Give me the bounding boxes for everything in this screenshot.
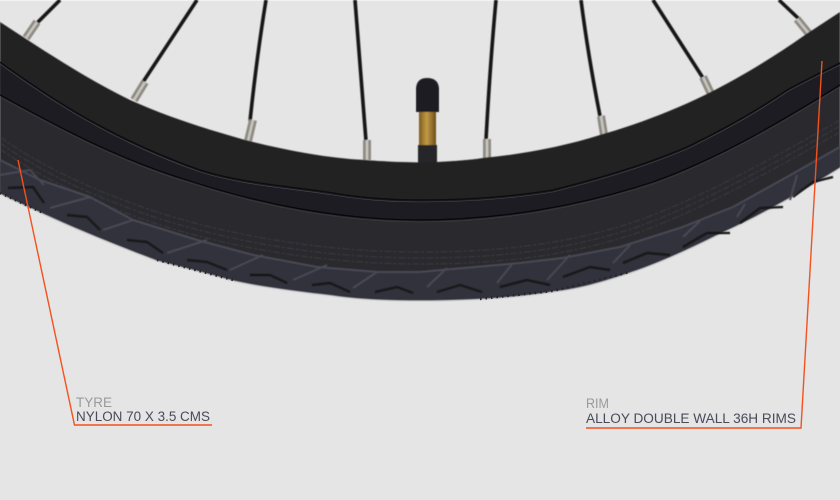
- callout: tyre: [18, 160, 212, 425]
- tread chevrons: [0, 147, 840, 293]
- tread band: [0, 147, 840, 300]
- tyre knobs: [0, 193, 630, 299]
- rim label: RIM: [586, 396, 609, 411]
- valve base: [418, 145, 437, 165]
- rim: [0, 12, 840, 220]
- valve: [416, 78, 439, 165]
- rim leader line: [586, 61, 822, 428]
- rim lines: [0, 62, 840, 222]
- tyre label: TYRE: [76, 395, 112, 410]
- tread light ridges: [0, 147, 840, 288]
- spokes: [26, 0, 810, 160]
- rim value: ALLOY DOUBLE WALL 36H RIMS: [586, 411, 796, 426]
- spoke nipples: [26, 19, 810, 160]
- callout: rim: [586, 61, 822, 428]
- tyre value: NYLON 70 X 3.5 CMS: [76, 409, 210, 424]
- tyre leader line: [18, 160, 212, 425]
- tyre: [0, 85, 840, 300]
- sidewall hex texture: [0, 120, 840, 264]
- rim groove band: [0, 62, 840, 220]
- valve stem: [419, 110, 436, 147]
- valve cap: [416, 78, 439, 112]
- tread dark chevrons: [8, 177, 833, 293]
